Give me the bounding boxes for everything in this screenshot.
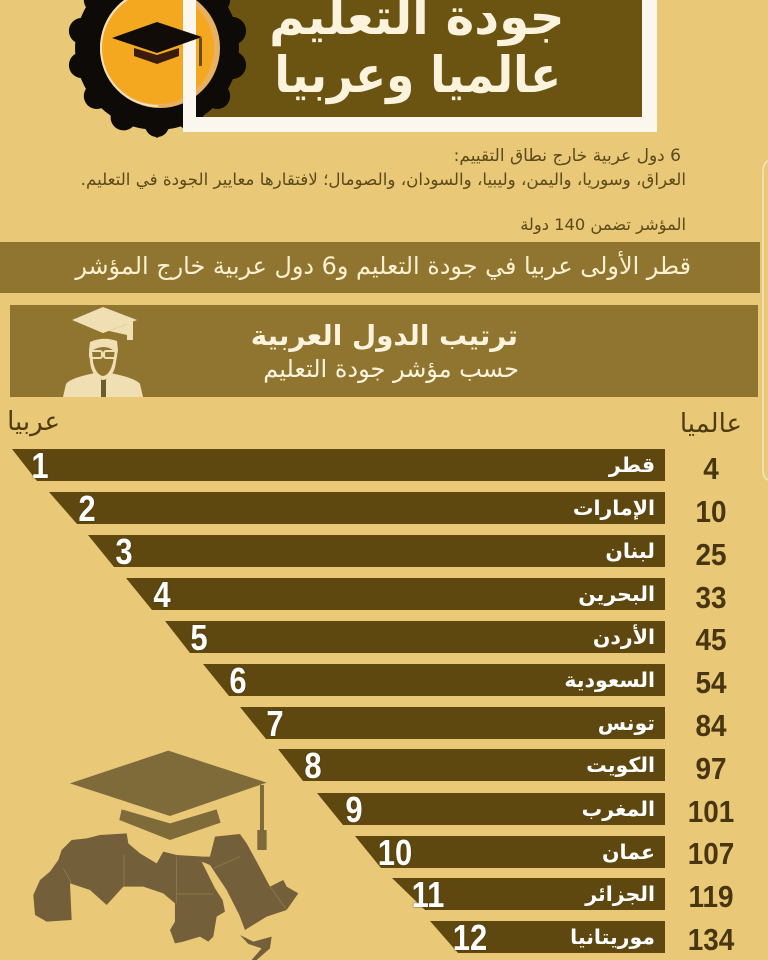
Arab rank 3: 3 (115, 531, 133, 572)
global rank 119: 119 (688, 879, 734, 914)
global rank 33: 33 (695, 580, 727, 615)
global rank 107: 107 (688, 836, 734, 871)
global rank 84: 84 (695, 708, 727, 743)
row 9: Morocco: المغرب (582, 797, 655, 821)
row 2: UAE: الإمارات (573, 496, 655, 520)
global rank 45: 45 (695, 622, 727, 657)
global rank 54: 54 (695, 665, 727, 700)
row 7: Tunisia: تونس (598, 711, 655, 735)
scrollbar edge artefact (763, 161, 768, 480)
icon: graduation cap on badge (112, 22, 202, 66)
title panel white frame (183, 0, 657, 132)
Arab rank 4: 4 (153, 574, 171, 615)
Arab rank 2: 2 (78, 488, 96, 529)
Arab rank 11: 11 (412, 874, 444, 915)
global rank 97: 97 (695, 751, 727, 786)
ranking bars (12, 449, 665, 953)
Arab rank 10: 10 (378, 832, 412, 873)
row 4: Bahrain: البحرين (578, 582, 655, 606)
global rank 10: 10 (695, 494, 727, 529)
row 3: Lebanon: لبنان (605, 539, 655, 563)
title: line two: عالميا وعربيا (274, 46, 561, 104)
banner: headline band (0, 242, 760, 293)
row 8: Kuwait: الكويت (586, 753, 655, 777)
global rank 101: 101 (688, 794, 734, 829)
ranking header title: ترتيب الدول العربية (251, 319, 518, 352)
Arab rank 8: 8 (304, 745, 322, 786)
row 10: Oman: عمان (602, 840, 655, 864)
row 6: Saudi Arabia: السعودية (564, 668, 655, 692)
banner: ranking header band (10, 305, 758, 397)
icon: gear badge (69, 0, 246, 138)
row 1: Qatar: قطر (609, 453, 655, 477)
text: index coverage: المؤشر تضمن 140 دولة (520, 215, 686, 234)
Arab rank 1: 1 (31, 445, 49, 486)
icon: graduate figure (63, 307, 143, 397)
title panel (196, 0, 642, 117)
text: excluded countries list: العراق، وسوريا، واليمن، وليبيا، والسودان، والصومال؛ لافتقارها معايير الجودة في التعليم. (81, 169, 686, 189)
row 12: Mauritania: موريتانيا (570, 925, 655, 949)
icon: Arab world map with graduation cap (33, 751, 298, 960)
Arab rank 6: 6 (229, 660, 247, 701)
ranking header subtitle: حسب مؤشر جودة التعليم (263, 355, 519, 383)
row 11: Algeria: الجزائر (585, 882, 655, 906)
Arab rank 9: 9 (345, 789, 363, 830)
text: excluded countries heading: 6 دول عربية خارج نطاق التقييم: (454, 146, 681, 166)
column label: global: عالميا (680, 409, 742, 439)
Arab rank 5: 5 (190, 617, 208, 658)
headline band text: قطر الأولى عربيا في جودة التعليم و6 دول عربية خارج المؤشر (75, 252, 691, 280)
global rank 134: 134 (688, 922, 734, 957)
global rank 4: 4 (703, 451, 719, 486)
column label: Arab: عربيا (7, 407, 60, 437)
Arab rank 12: 12 (453, 917, 487, 958)
row 5: Jordan: الأردن (593, 625, 655, 649)
global rank 25: 25 (695, 537, 727, 572)
Arab rank 7: 7 (266, 703, 284, 744)
